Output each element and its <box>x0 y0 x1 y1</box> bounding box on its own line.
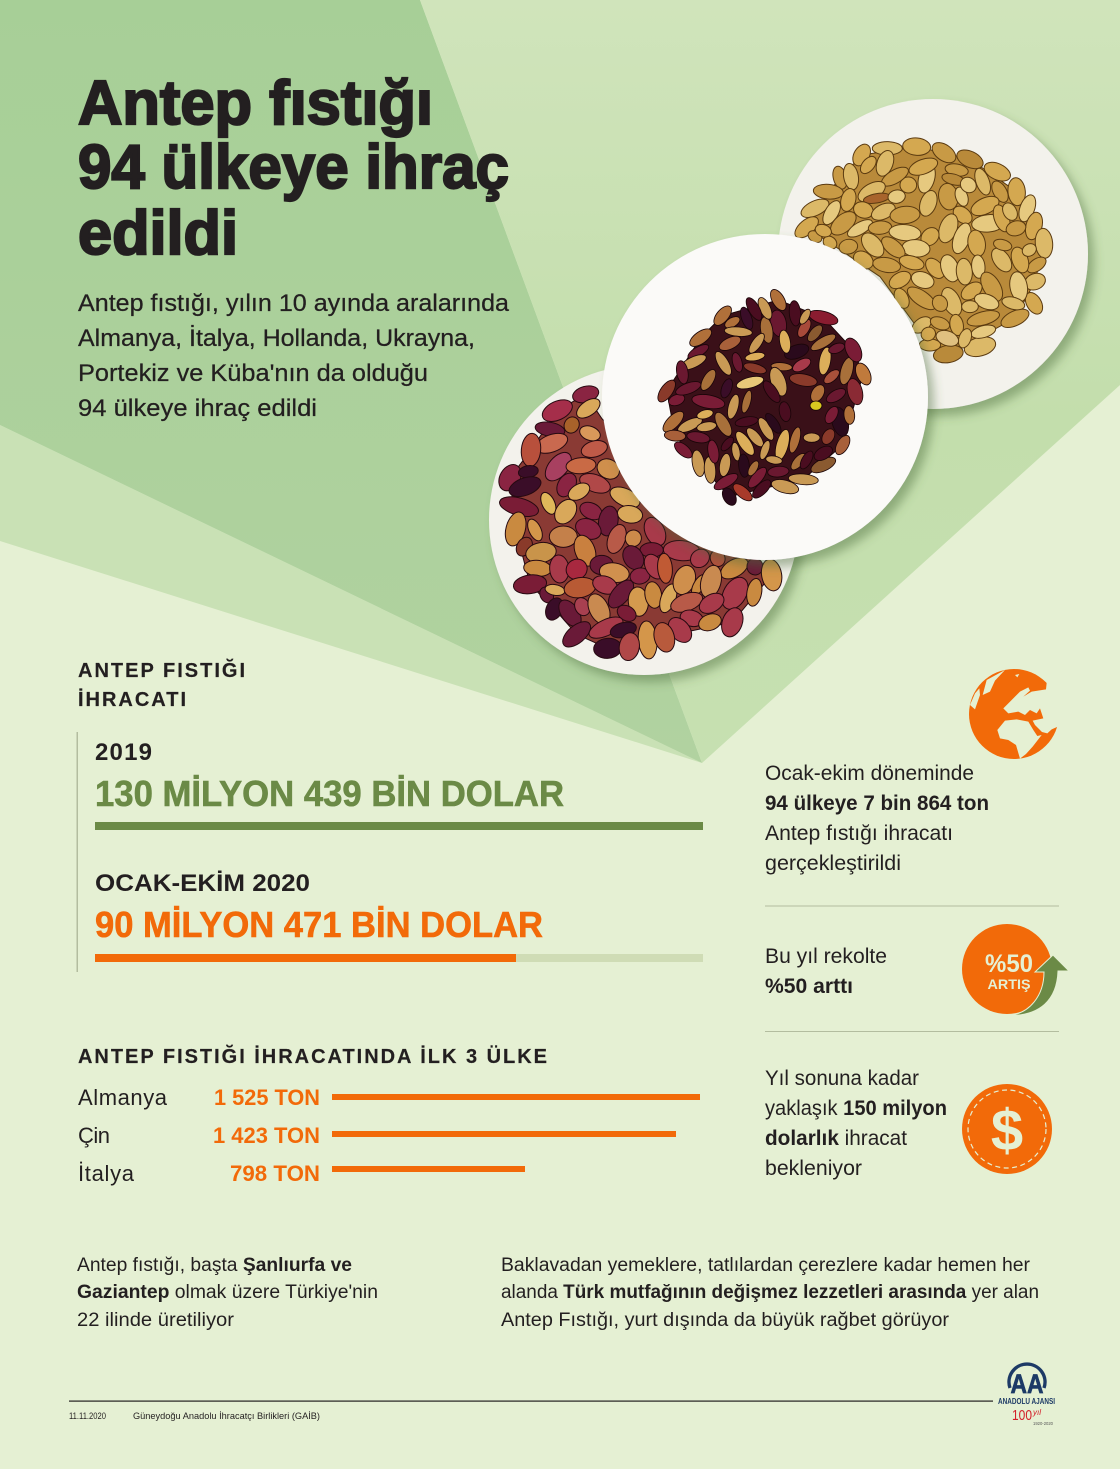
fact: harvest <box>765 945 887 998</box>
bar: Almanya: Almanya <box>78 1085 168 1110</box>
icon: orange globe <box>969 669 1067 759</box>
intro text: 94 ülkeye ihraç edildi <box>78 395 317 422</box>
fact: harvest: Bu yıl rekolte <box>765 945 887 968</box>
illustration: three plates of pistachios <box>489 99 1088 675</box>
plate: golden shelled pistachios <box>778 99 1088 409</box>
bar: Çin: 1 423 TON <box>213 1123 320 1148</box>
side panel: key facts <box>765 669 1069 1180</box>
footer <box>69 1364 1055 1426</box>
fact: year-end expectation: Yıl sonuna kadar <box>765 1067 919 1090</box>
panel: export comparison <box>76 658 703 972</box>
fact: export volume: 94 ülkeye 7 bin 864 ton <box>765 792 989 815</box>
text block: cuisine <box>501 1255 1039 1331</box>
heading: countries: ANTEP FISTIĞI İHRACATINDA İLK 3 ÜLKE <box>78 1044 547 1068</box>
intro text: Portekiz ve Küba'nın da olduğu <box>78 360 428 387</box>
bar: İtalya: 798 TON <box>230 1161 320 1186</box>
panel: top three countries <box>78 1044 700 1186</box>
fact: year-end expectation: dolarlık ihracat <box>765 1127 907 1150</box>
intro text: Almanya, İtalya, Hollanda, Ukrayna, <box>78 325 475 352</box>
title: Antep fıstığı <box>78 69 433 138</box>
text block: production: 22 ilinde üretiliyor <box>77 1310 235 1331</box>
heading: export: ANTEP FISTIĞI <box>78 658 245 682</box>
heading: export: İHRACATI <box>78 688 186 711</box>
text block: cuisine: alanda Türk mutfağının değişmez lezzetleri arasında yer alan <box>501 1282 1039 1303</box>
text block: production: Antep fıstığı, başta Şanlıurfa ve <box>77 1255 352 1276</box>
source: Güneydoğu Anadolu İhracatçı Birlikleri (GAİB) <box>133 1411 320 1422</box>
stat: 2020: OCAK-EKİM 2020 <box>95 870 310 897</box>
fact: year-end expectation: bekleniyor <box>765 1157 862 1180</box>
icon: %50 increase badge with arrow: ARTIŞ <box>988 976 1030 992</box>
icon: dollar coin <box>962 1084 1052 1174</box>
stat: 2020: 90 MİLYON 471 BİN DOLAR <box>95 904 543 945</box>
background: light band wedge <box>0 425 702 763</box>
fact: year-end expectation: yaklaşık 150 milyon <box>765 1097 947 1120</box>
fact: export volume: Antep fıstığı ihracatı <box>765 822 953 845</box>
text block: cuisine: Antep Fıstığı, yurt dışında da büyük rağbet görüyor <box>501 1310 950 1331</box>
date: 11.11.2020 <box>69 1411 106 1421</box>
stat: 2019: 130 MİLYON 439 BİN DOLAR <box>95 773 564 814</box>
logo: Anadolu Ajansı: ANADOLU AJANSI <box>998 1396 1055 1406</box>
bar: Çin <box>78 1123 676 1148</box>
bar: Çin: Çin <box>78 1123 110 1148</box>
fact: year-end expectation <box>765 1067 947 1180</box>
fact: export volume: Ocak-ekim döneminde <box>765 762 974 785</box>
plate: central dark pistachios <box>602 234 928 560</box>
stat: 2019 <box>95 739 703 830</box>
heading: export <box>78 658 245 711</box>
bar: Almanya: 1 525 TON <box>214 1085 320 1110</box>
logo: Anadolu Ajansı: AA <box>1010 1369 1044 1399</box>
logo: Anadolu Ajansı: yıl <box>1032 1408 1041 1417</box>
title <box>78 69 509 268</box>
logo: Anadolu Ajansı: 100 <box>1012 1407 1032 1424</box>
text block: cuisine: Baklavadan yemeklere, tatlılardan çerezlere kadar hemen her <box>501 1255 1031 1276</box>
plate: red skinned pistachios <box>489 365 799 675</box>
bar: İtalya <box>78 1161 525 1186</box>
fact: harvest: %50 arttı <box>765 975 853 998</box>
text block: production <box>77 1255 378 1331</box>
intro text: Antep fıstığı, yılın 10 ayında aralarında <box>78 290 510 317</box>
icon: %50 increase badge with arrow: %50 <box>985 950 1033 978</box>
stat: 2019: 2019 <box>95 739 152 766</box>
icon: %50 increase badge with arrow <box>962 924 1069 1016</box>
icon: dollar coin: $ <box>991 1098 1023 1163</box>
intro text <box>78 290 510 422</box>
background: dark green wedge <box>0 0 702 763</box>
fact: export volume <box>765 762 989 875</box>
background: mid green wedge <box>420 0 1120 763</box>
text block: production: Gaziantep olmak üzere Türkiye'nin <box>77 1282 378 1303</box>
logo: Anadolu Ajansı: 1920-2020 <box>1033 1421 1053 1426</box>
logo: Anadolu Ajansı <box>998 1364 1055 1426</box>
vertical rule <box>76 732 78 972</box>
bar: Almanya <box>78 1085 700 1110</box>
fact: export volume: gerçekleştirildi <box>765 852 901 875</box>
title: edildi <box>78 199 238 268</box>
bar: İtalya: İtalya <box>78 1161 135 1186</box>
stat: 2020 <box>95 870 703 962</box>
title: 94 ülkeye ihraç <box>78 133 509 202</box>
